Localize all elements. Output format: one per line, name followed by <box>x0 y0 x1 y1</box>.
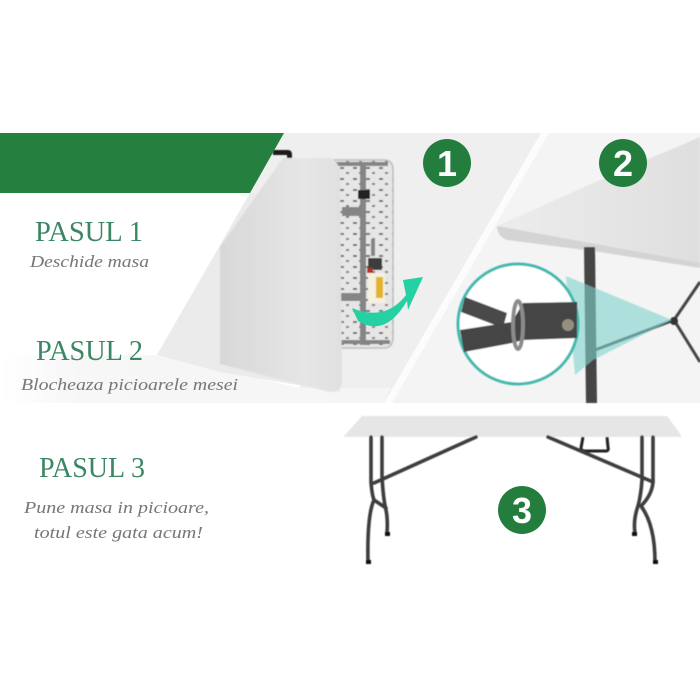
heading: step 3: PASUL 3 <box>39 452 145 484</box>
step number 1 <box>423 139 471 187</box>
feet <box>366 532 658 564</box>
frame bars <box>336 162 390 345</box>
table top <box>344 416 681 437</box>
table underside <box>332 160 393 348</box>
hinge bars <box>461 297 507 328</box>
table close-up illustration <box>497 137 700 403</box>
step number 3 <box>498 486 546 534</box>
text: step 1 description: Deschide masa <box>29 252 149 271</box>
table handle <box>581 437 608 451</box>
table edge <box>497 226 700 268</box>
table top corner <box>497 137 700 264</box>
full table illustration <box>344 416 681 564</box>
step number 3: 3 <box>512 490 532 531</box>
latch detail <box>367 258 385 303</box>
table top folded <box>220 158 342 392</box>
arrow <box>352 277 423 326</box>
step number 2: 2 <box>613 143 633 184</box>
step number 2 <box>599 139 647 187</box>
green banner <box>0 133 284 193</box>
heading: step 2: PASUL 2 <box>36 335 143 367</box>
zoom cone <box>566 276 672 375</box>
text: step 3 description <box>23 498 209 542</box>
step number 1: 1 <box>437 143 457 184</box>
icon: table handle <box>273 150 292 160</box>
text: step 3 description: totul este gata acum! <box>34 523 203 542</box>
bolt <box>562 319 574 331</box>
heading: step 1: PASUL 1 <box>35 216 143 248</box>
text: step 3 description: Pune masa in picioare, <box>23 498 209 517</box>
brace <box>595 282 700 362</box>
legs <box>368 437 655 562</box>
folded table illustration <box>220 150 393 392</box>
ring <box>513 301 523 349</box>
magnifier circle <box>458 264 578 384</box>
leg <box>584 247 597 403</box>
text: step 2 description: Blocheaza picioarele mesei <box>21 375 238 394</box>
